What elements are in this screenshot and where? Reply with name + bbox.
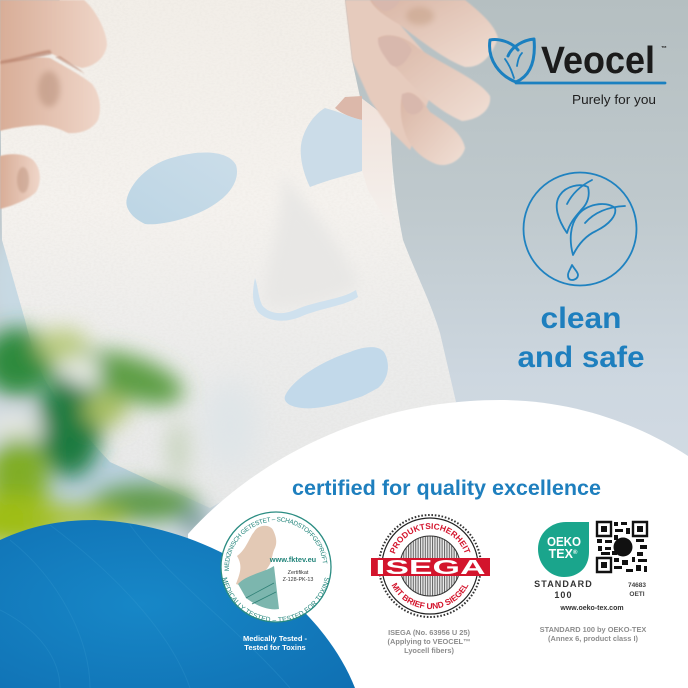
badge: ISEGA: MIT BRIEF UND SIEGEL (392, 582, 468, 610)
badge: ISEGA: ISEGA (376, 557, 486, 579)
badge: medically tested (220, 511, 332, 623)
caption: OEKO-TEX: (Annex 6, product class I) (548, 634, 639, 643)
badge: OEKO-TEX: OETI (629, 591, 645, 598)
left hand (0, 0, 107, 209)
badge: medically tested: www.fktev.eu (269, 555, 317, 564)
caption: medically tested (243, 634, 308, 652)
badge: medically tested: MEDICALLY TESTED – TESTED FOR TOXINS (222, 577, 329, 622)
icon: leaves and drop in circle (524, 172, 636, 286)
badge: ISEGA: PRODUKTSICHERHEIT (390, 523, 470, 554)
QR code (597, 522, 647, 572)
finger 1 (370, 0, 498, 67)
badge: OEKO-TEX (534, 522, 647, 612)
headline: clean and safe (518, 302, 644, 374)
palm (345, 0, 440, 150)
figure (236, 526, 279, 609)
teal leaf mark: TEX (549, 547, 573, 561)
badge: ISEGA (371, 514, 490, 618)
caption: ISEGA: ISEGA (No. 63956 U 25) (388, 628, 470, 637)
nose slit (253, 278, 358, 321)
finger 2 (0, 57, 100, 133)
blue leaf-patterned shape (0, 520, 355, 688)
finger 1 (0, 0, 107, 68)
left eye hole (126, 152, 237, 224)
caption: ISEGA (388, 628, 470, 655)
badge: OEKO-TEX: www.oeko-tex.com (559, 605, 624, 612)
caption: OEKO-TEX: STANDARD 100 by OEKO-TEX (540, 625, 646, 634)
plant foliage, blurred (0, 328, 209, 546)
caption: OEKO-TEX (540, 625, 646, 643)
caption: ISEGA: (Applying to VEOCEL™ (388, 637, 470, 646)
badge: OEKO-TEX: STANDARD (534, 579, 593, 589)
headline: clean and safe: and safe (518, 341, 644, 374)
sheet mask (0, 0, 460, 510)
finger 2 (378, 35, 490, 121)
caption: ISEGA: Lyocell fibers) (404, 646, 454, 655)
teal leaf mark: ® (573, 549, 578, 556)
badge: OEKO-TEX: 74683 (628, 582, 646, 589)
teal leaf mark (538, 522, 589, 577)
mouth hole (285, 347, 388, 408)
right eye hole (301, 108, 362, 187)
icon: leaf logo (490, 39, 665, 83)
badge: medically tested: Z-128-PK-13 (283, 577, 313, 583)
tagline: Purely for you (572, 93, 656, 107)
right eye skin behind (335, 96, 362, 120)
caption: medically tested: Medically Tested - (243, 634, 308, 643)
finger 3 (401, 92, 465, 165)
headline: clean and safe: clean (540, 302, 622, 335)
wordmark: Veocel (541, 40, 655, 82)
badge: medically tested: MEDIZINISCH GETESTET – SCHADSTOFFGEPRÜFT (224, 516, 328, 571)
white curved panel (188, 400, 688, 688)
logo: Veocel (490, 39, 667, 107)
caption: medically tested: Tested for Toxins (244, 643, 306, 652)
badge: medically tested: Zertifikat (288, 570, 309, 576)
logo: Veocel: ™ (661, 45, 667, 52)
badge: OEKO-TEX: 100 (554, 590, 573, 600)
finger 3 (0, 154, 40, 209)
teal leaf mark: OEKO (547, 535, 581, 549)
heading: certified for quality excellence: certified for quality excellence (292, 477, 601, 500)
right hand (345, 0, 498, 165)
